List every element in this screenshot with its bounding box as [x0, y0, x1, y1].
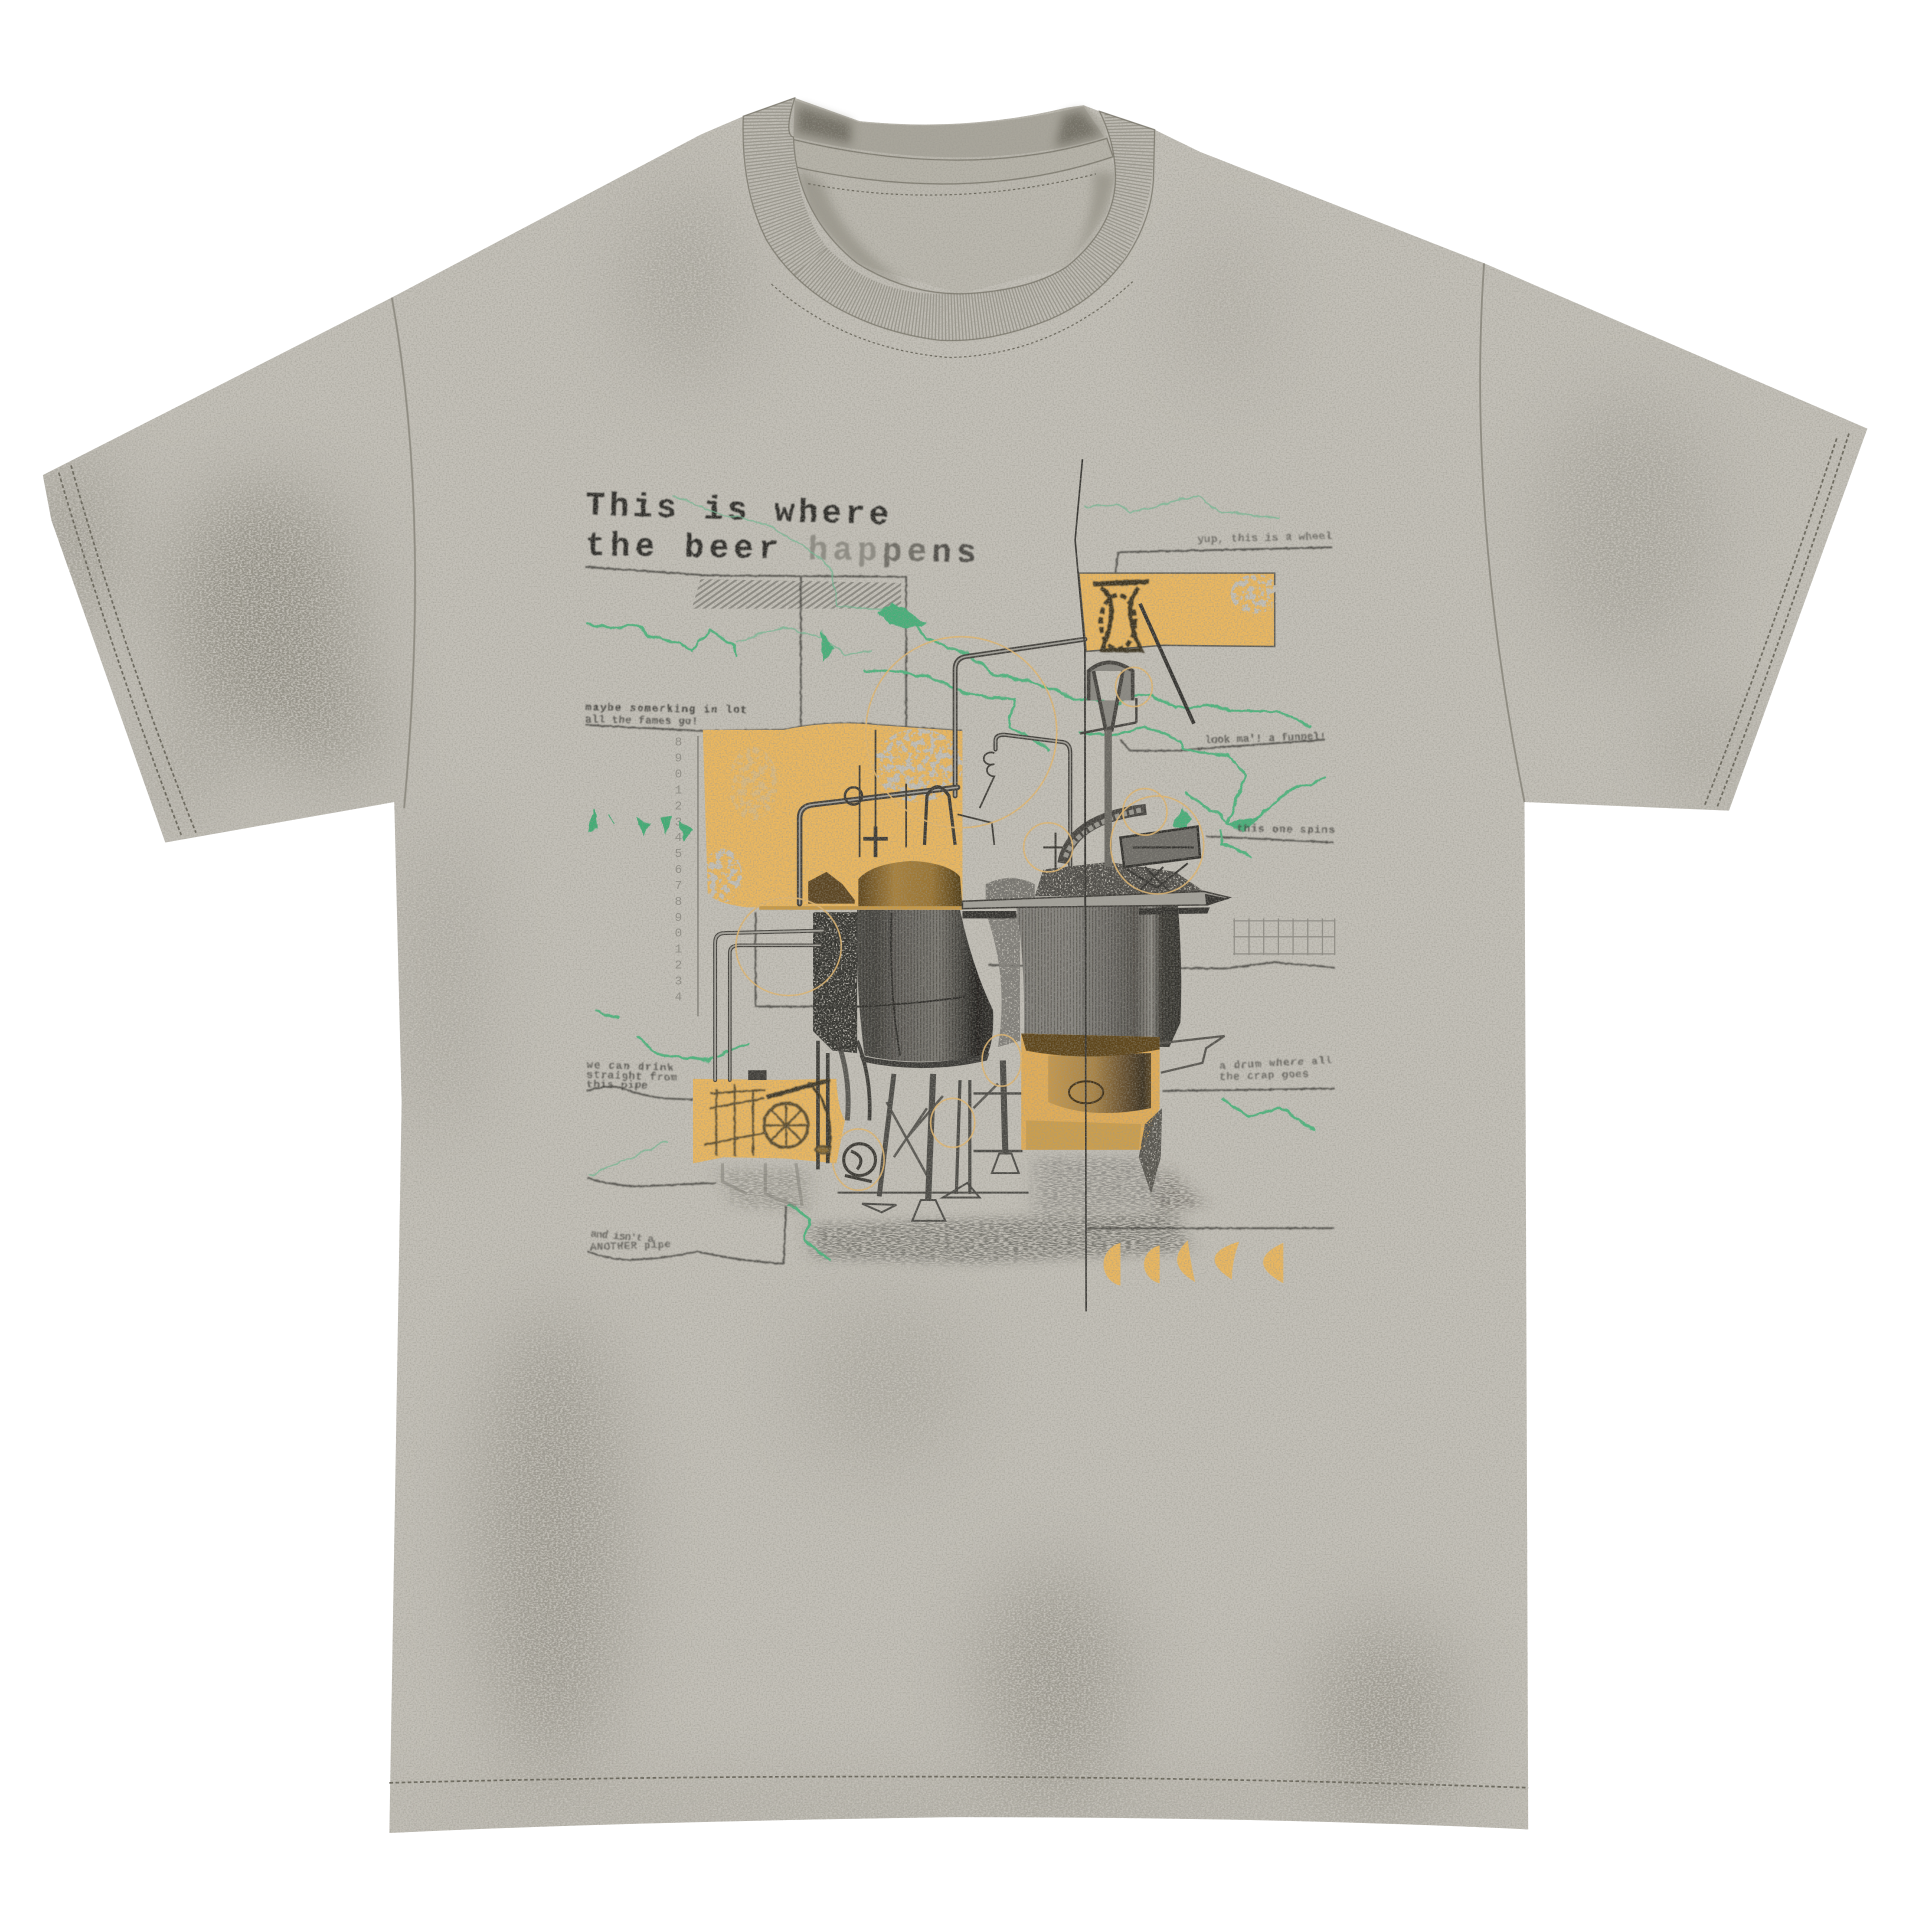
small hut in yellow [808, 872, 855, 904]
note: another: and isn't a [590, 1229, 655, 1246]
ruler: 0 [675, 768, 682, 782]
dome right [1035, 862, 1207, 896]
note: pipe [586, 1060, 677, 1092]
note: another [590, 1229, 671, 1254]
ruler: 9 [675, 911, 682, 925]
printed graphic [585, 459, 1335, 1311]
ruler: 5 [675, 847, 682, 861]
title line two: the beer happens [585, 527, 981, 572]
ruler: 3 [675, 815, 682, 829]
ruler: 1 [675, 943, 682, 957]
middle tank [987, 913, 1020, 1047]
boiler [1021, 1033, 1160, 1150]
wheel on yellow block [1093, 582, 1149, 650]
tank legs [838, 1060, 1029, 1221]
ruler: 1 [675, 783, 682, 797]
yellow panel: wheel block [1079, 573, 1275, 651]
title [585, 486, 981, 572]
ruler [675, 736, 698, 1016]
hatched block [692, 579, 901, 609]
ruler: 4 [675, 990, 682, 1004]
stitching and seams [59, 174, 1849, 1788]
faint machinery under pump [722, 1163, 802, 1206]
pipes [715, 639, 1146, 1080]
green veins [588, 496, 1326, 1260]
fabric shading [43, 184, 1739, 1824]
drain spout [1160, 1036, 1224, 1073]
wheel block wear [1231, 574, 1280, 613]
note: pipe: straight from [586, 1070, 677, 1085]
ground shadow [716, 1157, 1206, 1264]
middle dome [986, 878, 1035, 900]
moon phases [1104, 1240, 1283, 1286]
dome in yellow [858, 861, 962, 907]
note: pipe: we can drink [586, 1060, 674, 1075]
note: fumes [585, 702, 747, 728]
note: drum: the crap goes [1219, 1069, 1309, 1084]
ruler: 8 [675, 895, 682, 909]
note: drum: a drum where all [1219, 1055, 1332, 1073]
ruler: 2 [675, 799, 682, 813]
chain of machinery [818, 1041, 998, 1176]
note: wheel: yup, this is a wheel [1197, 531, 1332, 546]
note: another: ANOTHER pipe [590, 1239, 671, 1254]
green specks [589, 808, 692, 840]
inner neck shadow [793, 167, 1116, 288]
yellow panel: wear marks [703, 729, 962, 902]
neck tape seam [793, 138, 1113, 184]
note: funnel: look ma'! a funnel! [1205, 731, 1326, 747]
left small tank [813, 912, 857, 1053]
box on pipe block [748, 1070, 767, 1080]
ornate pump [844, 1144, 876, 1182]
neck interior [793, 98, 1116, 294]
callout frame lines [585, 547, 1335, 1264]
vertical axis line [1075, 459, 1086, 1311]
ruler: 7 [675, 879, 682, 893]
spinning machine [1120, 827, 1200, 891]
ruler: 4 [675, 831, 682, 845]
platform [759, 891, 1229, 918]
funnel and stand [1080, 649, 1136, 909]
boiler right post [1139, 1108, 1162, 1194]
green blots [820, 604, 1261, 1031]
note: drum [1219, 1055, 1332, 1084]
yellow panel: main block [703, 723, 962, 907]
note: fumes: maybe somerking in lot [585, 702, 747, 717]
pump wheel on yellow [704, 1080, 830, 1161]
ruler: 0 [675, 927, 682, 941]
ruler: 3 [675, 974, 682, 988]
back collar shadow corners [796, 105, 1102, 147]
brewing apparatus [704, 582, 1229, 1221]
annotations [585, 531, 1335, 1254]
front collar rib [743, 98, 1155, 341]
note: pipe: this pipe [586, 1079, 648, 1092]
right tank [1016, 906, 1181, 1047]
note: spins: this one spins [1237, 823, 1335, 837]
main tank [857, 910, 993, 1068]
small grid [1233, 918, 1335, 955]
ruler: 9 [675, 752, 682, 766]
orange rings [736, 637, 1204, 1190]
yellow panel: pipe block [693, 1079, 845, 1163]
note: fumes: all the fames go! [585, 714, 698, 728]
back collar rib [793, 100, 1104, 157]
long lever [1140, 604, 1194, 724]
ruler: 8 [675, 736, 682, 750]
ruler: 2 [675, 959, 682, 973]
title line one: This is where [585, 486, 893, 534]
ruler: 6 [675, 863, 682, 877]
collar ribbing [767, 96, 1130, 318]
